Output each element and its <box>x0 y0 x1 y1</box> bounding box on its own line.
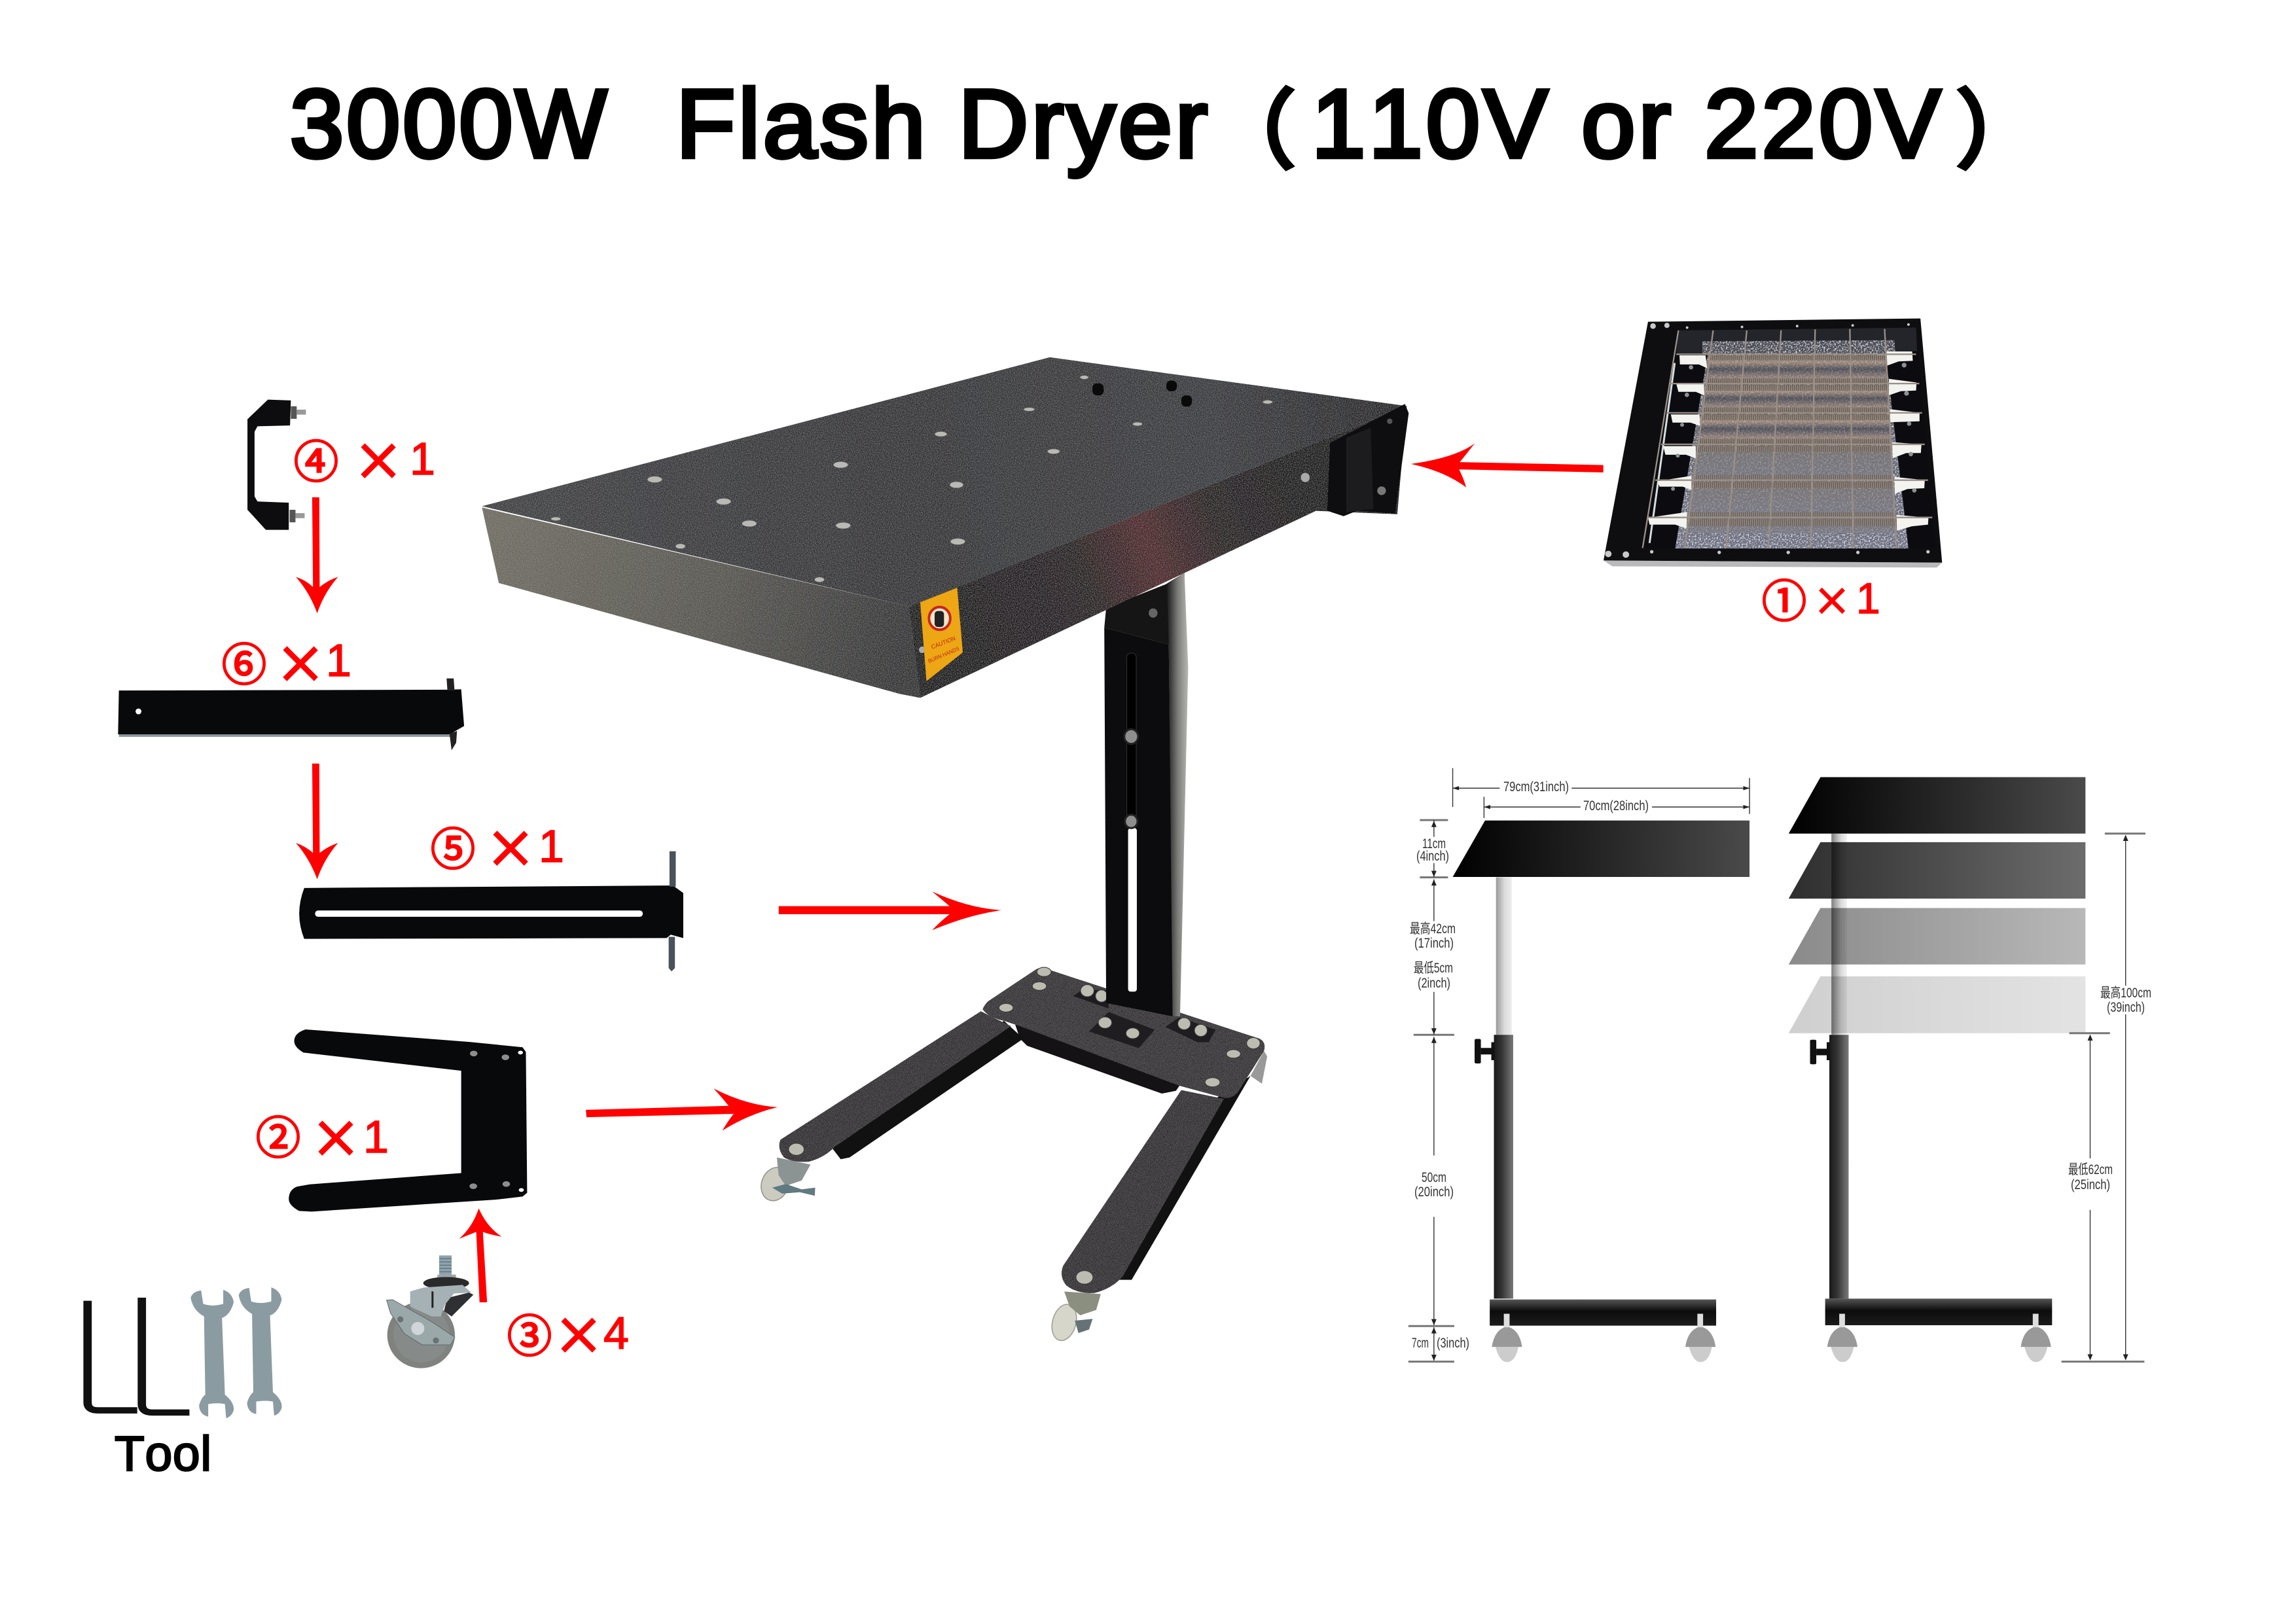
arrow: part 6 to part 5 <box>296 764 338 879</box>
label: part 3 quantity <box>507 1291 629 1378</box>
part 6: short bar <box>118 679 464 750</box>
label: part 2 quantity: ② <box>256 1102 300 1167</box>
title <box>290 62 2041 185</box>
hex keys <box>88 1298 189 1412</box>
label: part 5 quantity: ⑤ <box>431 813 475 878</box>
dimension labels: (4inch) <box>1416 849 1449 864</box>
stand column <box>1104 573 1188 1016</box>
dimension labels: (17inch) <box>1414 936 1454 951</box>
diagram shapes <box>1789 777 2145 1362</box>
dimension labels: 最高42cm <box>1410 921 1456 936</box>
part 3: caster wheel <box>387 1255 473 1368</box>
casters under the arms <box>757 1158 1101 1344</box>
dimension labels: (3inch) <box>1437 1336 1469 1351</box>
label: part 1 quantity: 1 <box>1856 574 1880 622</box>
label: part 3 quantity: ③ <box>507 1300 552 1365</box>
dryer end housing <box>1327 404 1408 516</box>
dryer body <box>482 357 1407 698</box>
tools: hex keys and wrenches <box>88 1287 281 1418</box>
dimension labels: 79cm(31inch) <box>1503 779 1569 794</box>
part 4: handle <box>247 400 306 530</box>
dimension labels <box>2068 986 2151 1192</box>
dimension diagram: lowest position <box>1408 768 1749 1362</box>
part 5: slotted bar <box>299 851 683 971</box>
label: part 6 quantity: ⑥ <box>222 629 266 694</box>
dimension labels: 11cm <box>1422 836 1446 851</box>
label: part 1 quantity <box>1762 565 1880 633</box>
label: part 3 quantity: × <box>556 1291 601 1378</box>
arrow: part 5 to column <box>779 891 1001 930</box>
label: part 5 quantity: × <box>488 804 533 891</box>
label: part 2 quantity: × <box>313 1094 359 1181</box>
part 2: U bracket <box>289 1029 527 1211</box>
label: part 5 quantity: 1 <box>539 821 564 872</box>
label: part 3 quantity: 4 <box>603 1308 629 1359</box>
title: ） <box>1956 62 2041 185</box>
dimension labels: (20inch) <box>1414 1185 1454 1200</box>
base plate and arms <box>780 967 1267 1293</box>
dimension labels: 最高100cm <box>2100 986 2151 1001</box>
warning sticker: CAUTION <box>930 635 956 651</box>
label: part 4 quantity: × <box>355 416 401 504</box>
main photo: assembled flash dryer <box>482 357 1408 1344</box>
arrow: handle to part 6 <box>296 497 338 613</box>
warning sticker: BURN HANDS <box>927 645 960 664</box>
dimension labels: (2inch) <box>1418 976 1450 991</box>
dimension labels: 最低5cm <box>1414 961 1453 976</box>
tools label: Tool <box>115 1426 211 1481</box>
warning sticker <box>920 588 963 681</box>
arrow: heater tray to dryer <box>1411 443 1604 488</box>
dimension labels: 最低62cm <box>2068 1162 2113 1177</box>
dimension labels <box>1410 779 1649 1351</box>
label: part 5 quantity <box>431 804 564 891</box>
wrenches <box>190 1287 281 1418</box>
dimension labels: 50cm <box>1422 1170 1446 1185</box>
label: part 6 quantity: × <box>278 619 323 707</box>
label: part 1 quantity: × <box>1815 568 1849 633</box>
arrow: caster to bracket <box>459 1209 502 1302</box>
title: 110V or 220V <box>1312 70 1941 178</box>
title: 3000W <box>290 70 607 178</box>
label: part 6 quantity: 1 <box>326 635 351 686</box>
title: Flash Dryer <box>676 70 1208 178</box>
label: part 4 quantity: 1 <box>410 433 435 484</box>
dimension diagram: height range <box>1789 777 2151 1362</box>
part 1: heater tray <box>1604 319 1942 567</box>
label: part 4 quantity <box>294 416 435 504</box>
label: part 2 quantity <box>256 1094 389 1181</box>
label: part 6 quantity <box>222 619 351 707</box>
dimension labels: 7cm <box>1412 1336 1429 1351</box>
dimension labels: (25inch) <box>2071 1177 2110 1192</box>
title: （ <box>1210 62 1295 185</box>
label: part 4 quantity: ④ <box>294 426 338 491</box>
heating elements <box>1643 329 1932 548</box>
label: part 2 quantity: 1 <box>363 1111 389 1162</box>
dimension labels: 70cm(28inch) <box>1583 798 1649 813</box>
front brackets and bolts at column foot <box>1089 1012 1215 1048</box>
dimension labels: (39inch) <box>2107 1000 2145 1015</box>
arrow: part 2 to base <box>586 1088 778 1131</box>
diagram shapes <box>1408 768 1749 1362</box>
label: part 1 quantity: ① <box>1762 565 1806 630</box>
